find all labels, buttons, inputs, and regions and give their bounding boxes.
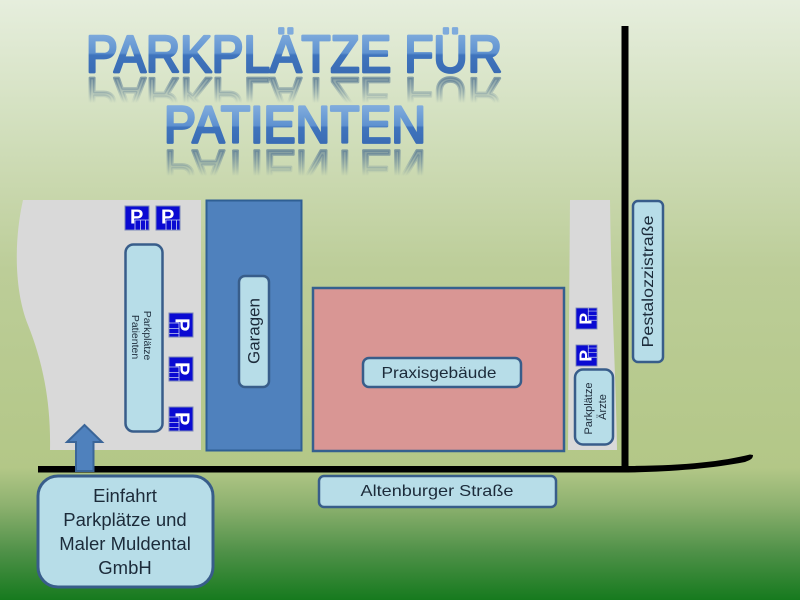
parking icon: doctors 2: P — [575, 350, 595, 362]
callout: entrance: Parkplätze und — [63, 509, 187, 530]
arrow: entrance — [67, 425, 102, 471]
label: Parkplätze Ärzte: Ärzte — [597, 394, 609, 420]
parking icon: side 3 — [169, 407, 193, 431]
callout: entrance: Einfahrt — [93, 485, 157, 506]
label: Parkplätze Patienten — [126, 244, 162, 432]
parking icon: side 2 — [169, 357, 193, 381]
callout: entrance: GmbH — [98, 557, 152, 578]
label: Pestalozzistraße — [633, 201, 663, 362]
callout: entrance: Maler Muldental — [59, 533, 191, 554]
label: Garagen: Garagen — [246, 298, 264, 364]
label: Altenburger Straße — [319, 476, 556, 507]
parking icon: side 2: P — [170, 362, 192, 375]
title: PATIENTEN — [164, 97, 426, 155]
parking icon: top right: P — [161, 206, 174, 228]
parking icon: doctors 1 — [575, 308, 597, 329]
parking icon: doctors 2 — [575, 345, 597, 366]
title: PATIENTEN — [164, 138, 426, 196]
parking icon: side 1 — [169, 313, 193, 337]
road: Altenburger Straße — [38, 454, 753, 472]
label: Altenburger Straße: Altenburger Straße — [360, 483, 514, 500]
label: Pestalozzistraße: Pestalozzistraße — [640, 215, 657, 348]
parking icon: side 3: P — [170, 412, 192, 425]
parking icon: top right — [156, 206, 180, 230]
parking icon: side 1: P — [170, 318, 192, 331]
label: Parkplätze Ärzte: Parkplätze — [583, 383, 595, 435]
doctor parking area — [568, 200, 617, 450]
parking icon: doctors 1: P — [575, 313, 595, 325]
title: PARKPLÄTZE FÜR — [86, 26, 502, 84]
building: practice — [313, 288, 564, 451]
patient parking area — [17, 200, 201, 450]
label: Praxisgebäude — [363, 358, 521, 387]
label: Garagen — [239, 276, 269, 387]
label: Parkplätze Patienten: Patienten — [129, 315, 141, 359]
callout: entrance — [38, 476, 213, 587]
label: Parkplätze Ärzte — [575, 370, 613, 444]
road: Pestalozzistraße — [622, 26, 628, 468]
title: PARKPLÄTZE FÜR — [86, 66, 502, 124]
building: garages — [206, 200, 302, 450]
parking icon: top left: P — [130, 206, 143, 228]
title — [86, 26, 502, 196]
label: Praxisgebäude: Praxisgebäude — [382, 365, 497, 382]
parking icon: top left — [125, 206, 149, 230]
label: Parkplätze Patienten: Parkplätze — [141, 311, 153, 361]
